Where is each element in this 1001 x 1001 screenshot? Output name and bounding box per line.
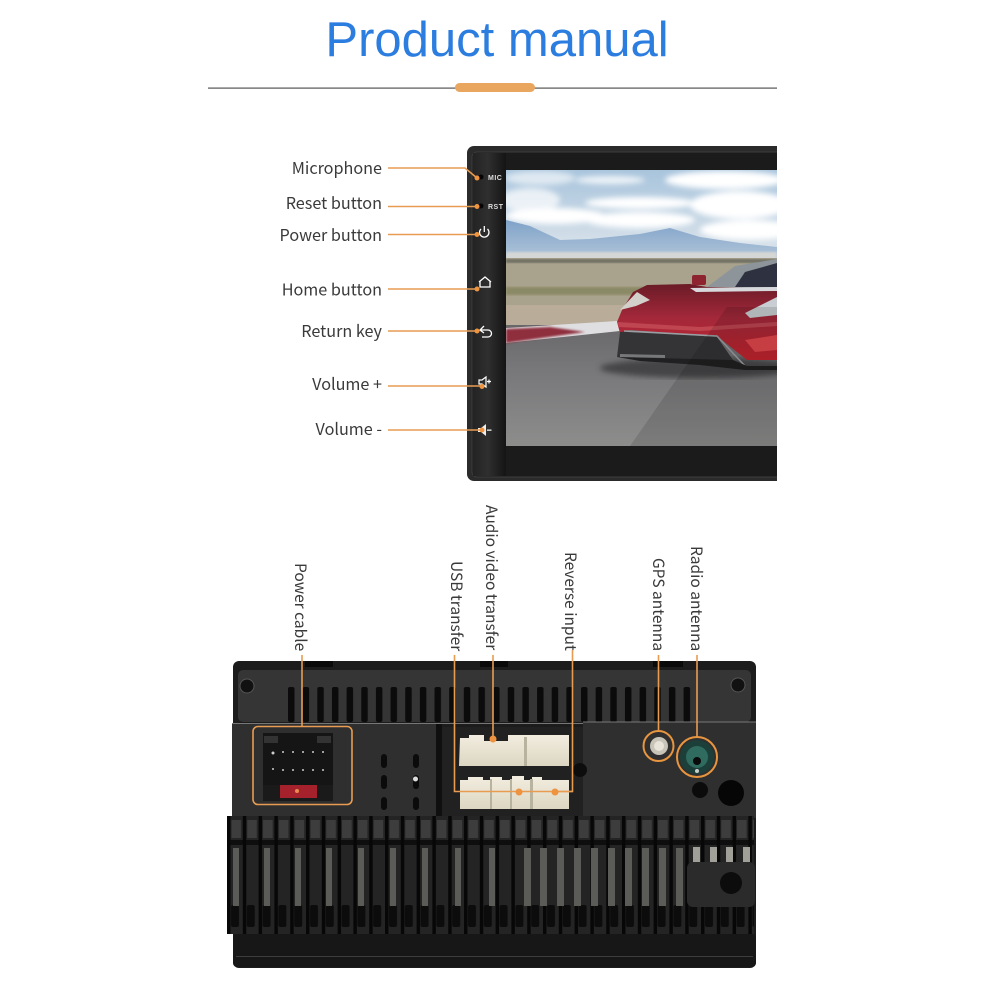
callout: Radio antenna <box>677 546 717 777</box>
grille <box>617 331 733 361</box>
callout: Reverse input <box>552 552 582 796</box>
power connector <box>263 733 333 801</box>
screen glare <box>630 307 777 446</box>
label: Home button <box>282 276 480 300</box>
icon: volume up <box>479 377 491 387</box>
label: Home button: Home button <box>282 276 382 300</box>
slots in plate <box>381 754 387 768</box>
callout: Power cable <box>253 563 352 804</box>
holes <box>692 782 708 798</box>
label: Microphone <box>292 155 480 180</box>
windshield <box>707 259 777 288</box>
road shadow beneath car <box>600 358 800 378</box>
antenna sockets <box>650 737 714 774</box>
middle plates <box>232 723 436 818</box>
label: Power button: Power button <box>280 222 382 246</box>
icon: MIC label <box>478 174 502 182</box>
callout: Reverse input: Reverse input <box>560 552 582 651</box>
icon: return <box>480 326 492 337</box>
label: Power button <box>280 222 480 246</box>
callout: GPS antenna <box>644 558 674 761</box>
title: Product manual <box>325 13 669 67</box>
callout: USB transfer <box>446 561 572 796</box>
panel: front of head unit <box>467 146 800 481</box>
label: Volume +: Volume + <box>312 371 382 395</box>
callout: Radio antenna: Radio antenna <box>686 546 708 651</box>
label: Volume - <box>316 416 484 440</box>
icon: volume down <box>478 424 492 436</box>
touchscreen picture <box>500 170 800 446</box>
icon: MIC label: MIC <box>488 175 502 182</box>
white connectors <box>459 735 569 809</box>
title divider with orange pill <box>208 83 777 92</box>
panel: rear of head unit <box>227 661 756 968</box>
callout: Audio video transfer <box>481 505 503 742</box>
car body <box>617 284 777 360</box>
callout: USB transfer: USB transfer <box>446 561 468 652</box>
label: Microphone: Microphone <box>292 155 382 179</box>
fin slots <box>233 848 683 906</box>
screws <box>240 679 254 693</box>
callout: GPS antenna: GPS antenna <box>648 558 670 651</box>
label: Reset button: Reset button <box>286 190 382 214</box>
label: Return key: Return key <box>301 318 383 342</box>
icon: power <box>480 226 489 237</box>
lower fins <box>227 816 754 934</box>
callout: Power cable: Power cable <box>290 563 312 651</box>
icon: RST label <box>478 204 504 211</box>
label: Volume + <box>312 371 484 395</box>
label: Return key <box>301 318 480 342</box>
label: Volume -: Volume - <box>316 416 382 440</box>
knob plate <box>687 862 755 907</box>
label: Reset button <box>286 190 480 214</box>
icon: RST label: RST <box>488 204 504 211</box>
icon: home <box>479 277 491 287</box>
callout: Audio video transfer: Audio video transfer <box>481 505 503 651</box>
